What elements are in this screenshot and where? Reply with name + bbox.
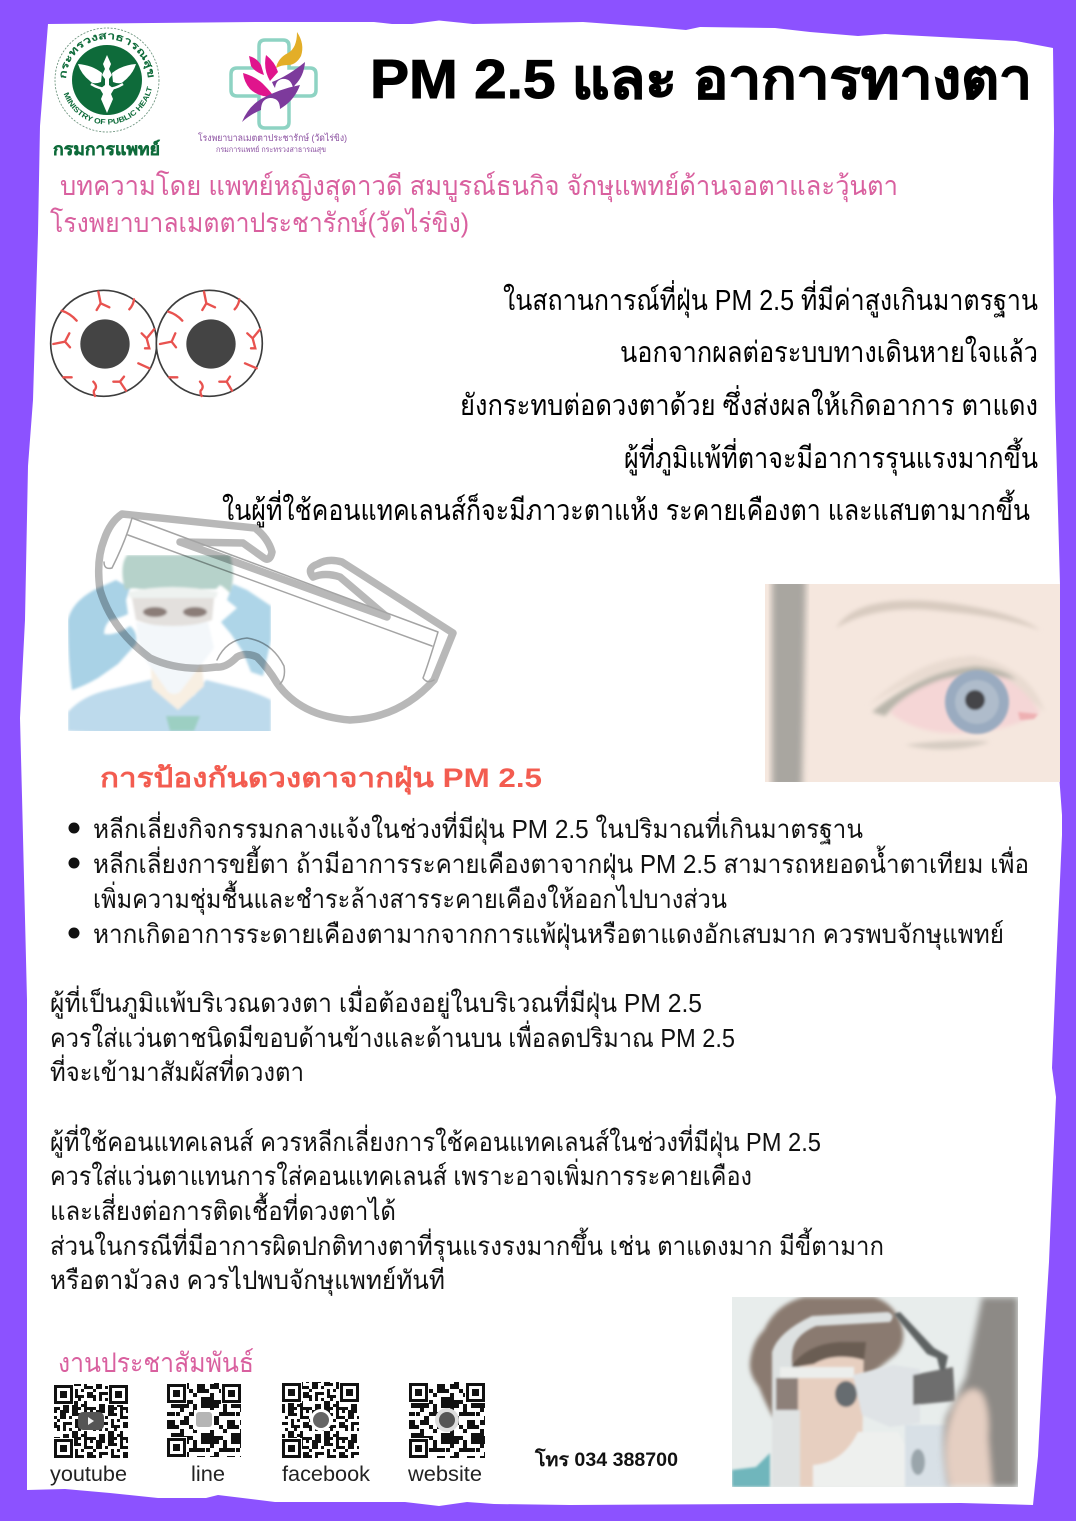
- photo: eye examination: [732, 1297, 1018, 1487]
- icon: safety goggles: [99, 514, 453, 720]
- QR code: website: [407, 1382, 486, 1486]
- prevention bullet list: หลีกเลี่ยงการขยี้ตา ถ้ามีอาการระคายเคืองตาจากฝุ่น PM 2.5 สามารถหยอดน้ำตาเทียม เพื่อ: [93, 845, 1029, 880]
- logo: Department of Medical Services: กระทรวงสาธารณสุข: [60, 32, 154, 78]
- contact lens advice paragraph: [50, 1124, 884, 1296]
- section heading: การป้องกันดวงตาจากฝุ่น PM 2.5: [100, 763, 542, 795]
- allergy advice paragraph: ผู้ที่เป็นภูมิแพ้บริเวณดวงตา เมื่อต้องอยู่ในบริเวณที่มีฝุ่น PM 2.5: [50, 985, 702, 1019]
- author byline: บทความโดย แพทย์หญิงสุดาวดี สมบูรณ์ธนกิจ จักษุแพทย์ด้านจอตาและวุ้นตา: [60, 170, 898, 203]
- author byline: โรงพยาบาลเมตตาประชารักษ์(วัดไร่ขิง): [50, 207, 469, 238]
- author byline: [50, 170, 898, 238]
- title: PM 2.5 และ อาการทางตา: [370, 48, 1032, 110]
- logo: Metta Pracharak hospital: กรมการแพทย์ กระทรวงสาธารณสุข: [216, 145, 326, 154]
- phone number: โทร 034 388700: [534, 1448, 678, 1471]
- allergy advice paragraph: ที่จะเข้ามาสัมผัสที่ดวงตา: [50, 1054, 304, 1087]
- allergy advice paragraph: ควรใส่แว่นตาชนิดมีขอบด้านข้างและด้านบน เพื่อลดปริมาณ PM 2.5: [50, 1020, 735, 1053]
- prevention bullet list: [68, 811, 1029, 950]
- QR code: line: [166, 1383, 242, 1486]
- intro paragraph: [222, 280, 1038, 528]
- contact lens advice paragraph: ผู้ที่ใช้คอนแทคเลนส์ ควรหลีกเลี่ยงการใช้คอนแทคเลนส์ในช่วงที่มีฝุ่น PM 2.5: [50, 1124, 821, 1158]
- QR code: line: line: [191, 1463, 225, 1486]
- contact lens advice paragraph: หรือตามัวลง ควรไปพบจักษุแพทย์ทันที: [50, 1265, 445, 1296]
- photo: red irritated eye: [765, 584, 1060, 782]
- photo: surgeon putting on goggles: [68, 555, 271, 731]
- contact lens advice paragraph: และเสี่ยงต่อการติดเชื้อที่ดวงตาได้: [50, 1192, 396, 1226]
- allergy advice paragraph: [50, 985, 735, 1087]
- QR code: facebook: facebook: [282, 1463, 371, 1486]
- QR code: youtube: [50, 1384, 129, 1486]
- public relations heading: งานประชาสัมพันธ์: [58, 1347, 254, 1378]
- contact lens advice paragraph: ส่วนในกรณีที่มีอาการผิดปกติทางตาที่รุนแรงรงมากขึ้น เช่น ตาแดงมาก มีขี้ตามาก: [50, 1227, 884, 1262]
- prevention bullet list: เพิ่มความชุ่มชื้นและชำระล้างสารระคายเคืองให้ออกไปบางส่วน: [93, 880, 727, 915]
- logo: Metta Pracharak hospital: [198, 32, 347, 154]
- contact lens advice paragraph: ควรใส่แว่นตาแทนการใส่คอนแทคเลนส์ เพราะอาจเพิ่มการระคายเคือง: [50, 1158, 752, 1191]
- icon: bloodshot eyes: [51, 290, 262, 396]
- prevention bullet list: หากเกิดอาการระดายเคืองตามากจากการแพ้ฝุ่นหรือตาแดงอักเสบมาก ควรพบจักษุแพทย์: [93, 919, 1004, 950]
- QR code: facebook: [281, 1382, 371, 1486]
- QR code: website: website: [407, 1463, 482, 1486]
- QR code: youtube: youtube: [50, 1463, 127, 1486]
- logo: Department of Medical Services: กรมการแพทย์: [53, 139, 160, 159]
- logo: Department of Medical Services: [53, 28, 160, 159]
- logo: Metta Pracharak hospital: โรงพยาบาลเมตตาประชารักษ์ (วัดไร่ขิง): [198, 132, 347, 144]
- prevention bullet list: หลีกเลี่ยงกิจกรรมกลางแจ้งในช่วงที่มีฝุ่น PM 2.5 ในปริมาณที่เกินมาตรฐาน: [93, 811, 863, 845]
